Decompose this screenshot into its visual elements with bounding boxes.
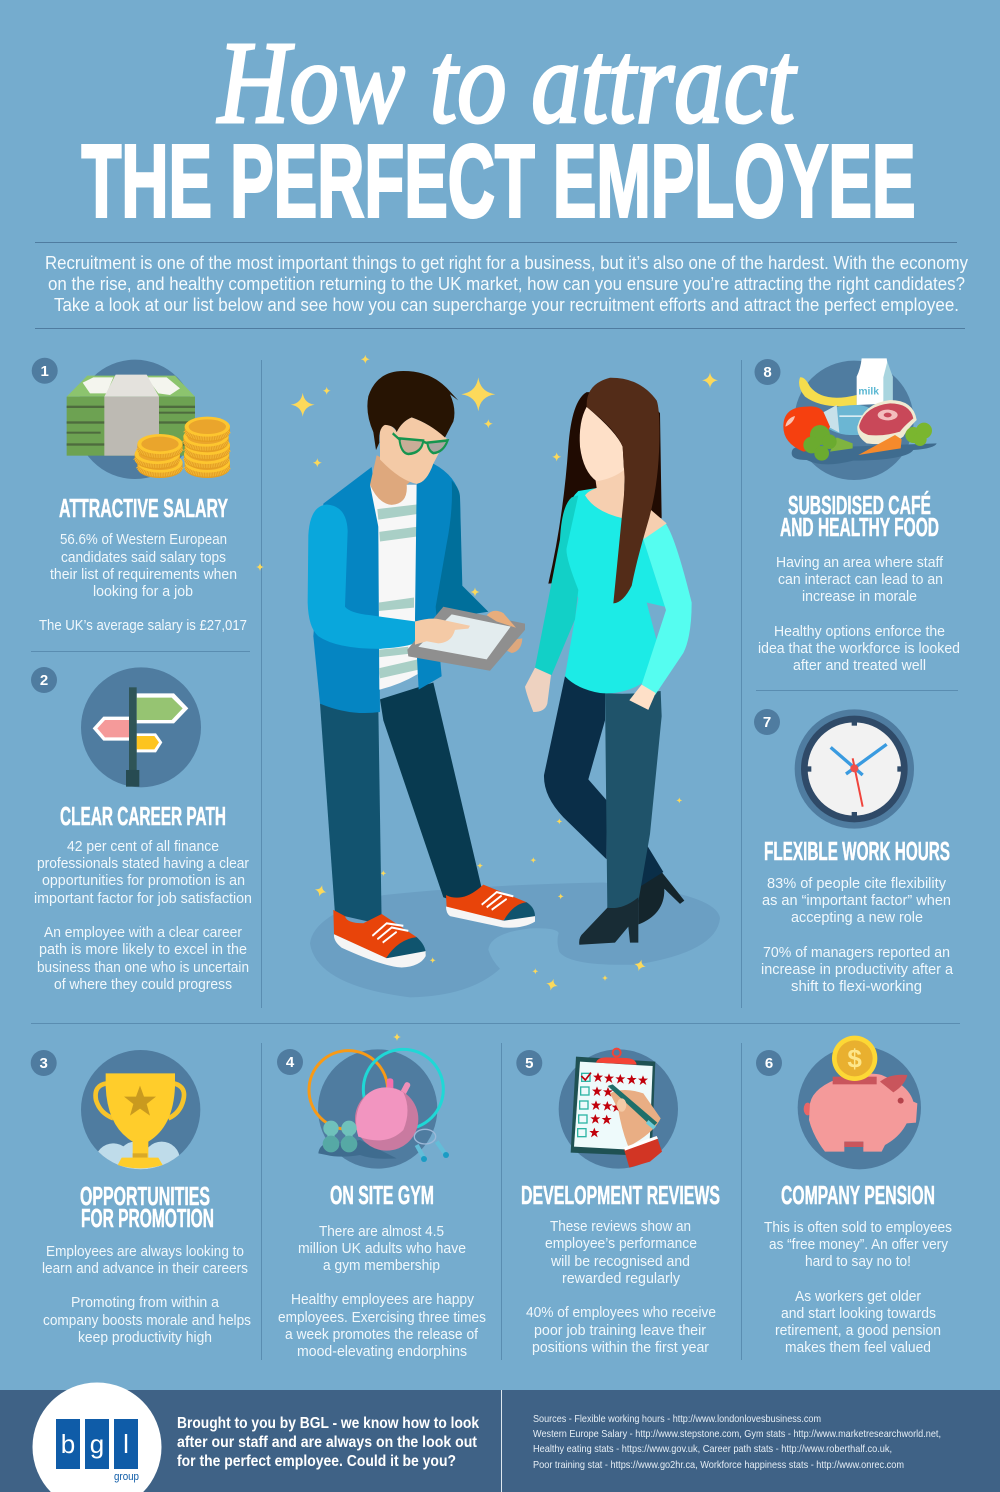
- icon: clipboard with star ratings: [559, 1049, 678, 1169]
- title: How to attract: [216, 17, 798, 148]
- number badge 6: [756, 1050, 782, 1076]
- logo: bgl group: g: [90, 1429, 104, 1459]
- sparkles: [291, 355, 718, 992]
- number badge 1: [32, 358, 58, 384]
- panel: opportunities for promotion: [31, 1050, 251, 1346]
- footer message: Brought to you by BGL - we know how to look: [177, 1415, 479, 1432]
- icon: healthy food: milk: [858, 387, 879, 398]
- panel: flexible work hours: [754, 709, 954, 995]
- number badge 5: [516, 1050, 542, 1076]
- body text: keep productivity high: [78, 1330, 212, 1346]
- intro text: [45, 253, 968, 315]
- body text: Healthy options enforce the: [774, 624, 945, 640]
- body text: shift to flexi-working: [791, 979, 922, 995]
- number badge 2: 2: [40, 672, 48, 689]
- body text: The UK’s average salary is £27,017: [39, 618, 247, 634]
- body text: poor job training leave their: [534, 1323, 706, 1339]
- body text: [278, 1224, 486, 1360]
- panel: clear career path: [31, 667, 252, 993]
- intro text: on the rise, and healthy competition returning to the UK market, how can you ensure you’re attracting the right candidates?: [48, 274, 965, 294]
- body text: employee’s performance: [545, 1236, 697, 1252]
- number badge 7: [754, 709, 780, 735]
- logo: bgl group: [32, 1382, 162, 1492]
- title: [82, 17, 916, 238]
- intro text: Take a look at our list below and see how you can supercharge your recruitment efforts and attract the perfect employee.: [54, 295, 959, 315]
- body text: [34, 839, 252, 993]
- icon: healthy food: [783, 358, 937, 480]
- body text: Healthy employees are happy: [291, 1292, 475, 1308]
- number badge 4: [277, 1049, 303, 1075]
- body text: retirement, a good pension: [775, 1323, 941, 1339]
- panel: company pension: [756, 1036, 952, 1356]
- body text: a week promotes the release of: [285, 1327, 479, 1343]
- body text: [761, 876, 954, 995]
- panel: attractive salary: [32, 358, 247, 634]
- icon: gym equipment: [309, 1049, 449, 1169]
- woman: [525, 378, 692, 945]
- body text: of where they could progress: [54, 977, 232, 993]
- body text: [39, 532, 247, 634]
- body text: learn and advance in their careers: [42, 1261, 248, 1277]
- body text: Promoting from within a: [71, 1295, 220, 1311]
- footer message: [177, 1415, 479, 1470]
- ground shadow: [310, 882, 720, 997]
- footer message: after our staff and are always on the look out: [177, 1434, 478, 1451]
- body text: as “free money”. An offer very: [769, 1237, 949, 1253]
- body text: hard to say no to!: [805, 1254, 911, 1270]
- body text: accepting a new role: [791, 910, 923, 926]
- icon: piggy bank: [798, 1036, 921, 1169]
- body text: Employees are always looking to: [46, 1244, 244, 1260]
- small sparkle on divider: [256, 563, 264, 571]
- heading: OPPORTUNITIES: [80, 1183, 210, 1211]
- logo: bgl group: l: [123, 1429, 129, 1459]
- number badge 8: [754, 359, 780, 385]
- heading: [80, 1183, 214, 1233]
- body text: mood-elevating endorphins: [297, 1344, 467, 1360]
- icon: clock: [795, 709, 914, 829]
- body text: 42 per cent of all finance: [67, 839, 219, 855]
- body text: positions within the first year: [532, 1340, 709, 1356]
- heading: CLEAR CAREER PATH: [60, 803, 226, 831]
- body text: company boosts morale and helps: [43, 1313, 251, 1329]
- central illustration: two people: [291, 355, 720, 997]
- body text: makes them feel valued: [785, 1340, 931, 1356]
- number badge 3: [31, 1050, 57, 1076]
- body text: There are almost 4.5: [319, 1224, 444, 1240]
- body text: rewarded regularly: [562, 1271, 681, 1287]
- footer message: for the perfect employee. Could it be you?: [177, 1453, 456, 1470]
- number badge 4: 4: [286, 1054, 295, 1071]
- number badge 3: 3: [40, 1055, 48, 1072]
- number badge 5: 5: [525, 1055, 533, 1072]
- body text: will be recognised and: [550, 1254, 690, 1270]
- heading: DEVELOPMENT REVIEWS: [521, 1182, 720, 1210]
- body text: [526, 1219, 716, 1356]
- body text: increase in productivity after a: [761, 962, 954, 978]
- number badge 1: 1: [41, 363, 49, 380]
- body text: candidates said salary tops: [61, 550, 226, 566]
- heading: ON SITE GYM: [330, 1182, 434, 1210]
- body text: and start looking towards: [781, 1306, 936, 1322]
- body text: idea that the workforce is looked: [758, 641, 960, 657]
- body text: employees. Exercising three times: [278, 1310, 486, 1326]
- body text: 56.6% of Western European: [60, 532, 227, 548]
- body text: important factor for job satisfaction: [34, 891, 252, 907]
- sources: [533, 1413, 941, 1471]
- number badge 7: 7: [763, 714, 771, 731]
- icon: money and coins: [67, 360, 230, 479]
- body text: path is more likely to excel in the: [39, 942, 247, 958]
- body text: [764, 1220, 952, 1356]
- icon: signpost: [81, 667, 201, 787]
- body text: [42, 1244, 251, 1346]
- body text: million UK adults who have: [298, 1241, 466, 1257]
- body text: a gym membership: [323, 1258, 440, 1274]
- man: [308, 371, 535, 967]
- number badge 6: 6: [765, 1055, 773, 1072]
- body text: after and treated well: [793, 658, 926, 674]
- icon: piggy bank: $: [847, 1044, 862, 1074]
- body text: increase in morale: [802, 589, 917, 605]
- body text: 70% of managers reported an: [763, 945, 950, 961]
- number badge 8: 8: [763, 364, 772, 381]
- heading: FOR PROMOTION: [81, 1205, 214, 1233]
- body text: business than one who is uncertain: [37, 960, 249, 976]
- footer band: [0, 1382, 1000, 1492]
- sources: Poor training stat - https://www.go2hr.ca, Workforce happiness stats - http://www.onrec.com: [533, 1459, 904, 1471]
- body text: 83% of people cite flexibility: [767, 876, 947, 892]
- sources: Sources - Flexible working hours - http://www.londonlovesbusiness.com: [533, 1413, 821, 1425]
- body text: their list of requirements when: [50, 567, 237, 583]
- body text: professionals stated having a clear: [37, 856, 249, 872]
- body text: opportunities for promotion is an: [42, 873, 245, 889]
- panel: subsidised cafe: [754, 358, 960, 674]
- sources: Western Europe Salary - http://www.stepstone.com, Gym stats - http://www.marketresearchworld.net,: [533, 1428, 941, 1440]
- number badge 2: [31, 667, 57, 693]
- body text: As workers get older: [795, 1289, 921, 1305]
- heading: ATTRACTIVE SALARY: [59, 495, 228, 523]
- logo: bgl group: b: [61, 1429, 75, 1459]
- panel: on site gym: [277, 1049, 486, 1360]
- logo: bgl group: group: [114, 1471, 139, 1483]
- heading: [780, 491, 939, 542]
- panel: development reviews: [516, 1049, 720, 1356]
- body text: This is often sold to employees: [764, 1220, 952, 1236]
- sources: Healthy eating stats - https://www.gov.uk, Career path stats - http://www.roberthalf.co.uk,: [533, 1443, 892, 1455]
- body text: Having an area where staff: [776, 555, 944, 571]
- body text: An employee with a clear career: [44, 925, 242, 941]
- body text: looking for a job: [93, 584, 193, 600]
- body text: as an “important factor” when: [762, 893, 951, 909]
- body text: 40% of employees who receive: [526, 1305, 716, 1321]
- small sparkle above gym: [393, 1033, 401, 1041]
- body text: [758, 555, 960, 674]
- body text: can interact can lead to an: [778, 572, 943, 588]
- icon: trophy: [81, 1050, 200, 1180]
- body text: These reviews show an: [550, 1219, 691, 1235]
